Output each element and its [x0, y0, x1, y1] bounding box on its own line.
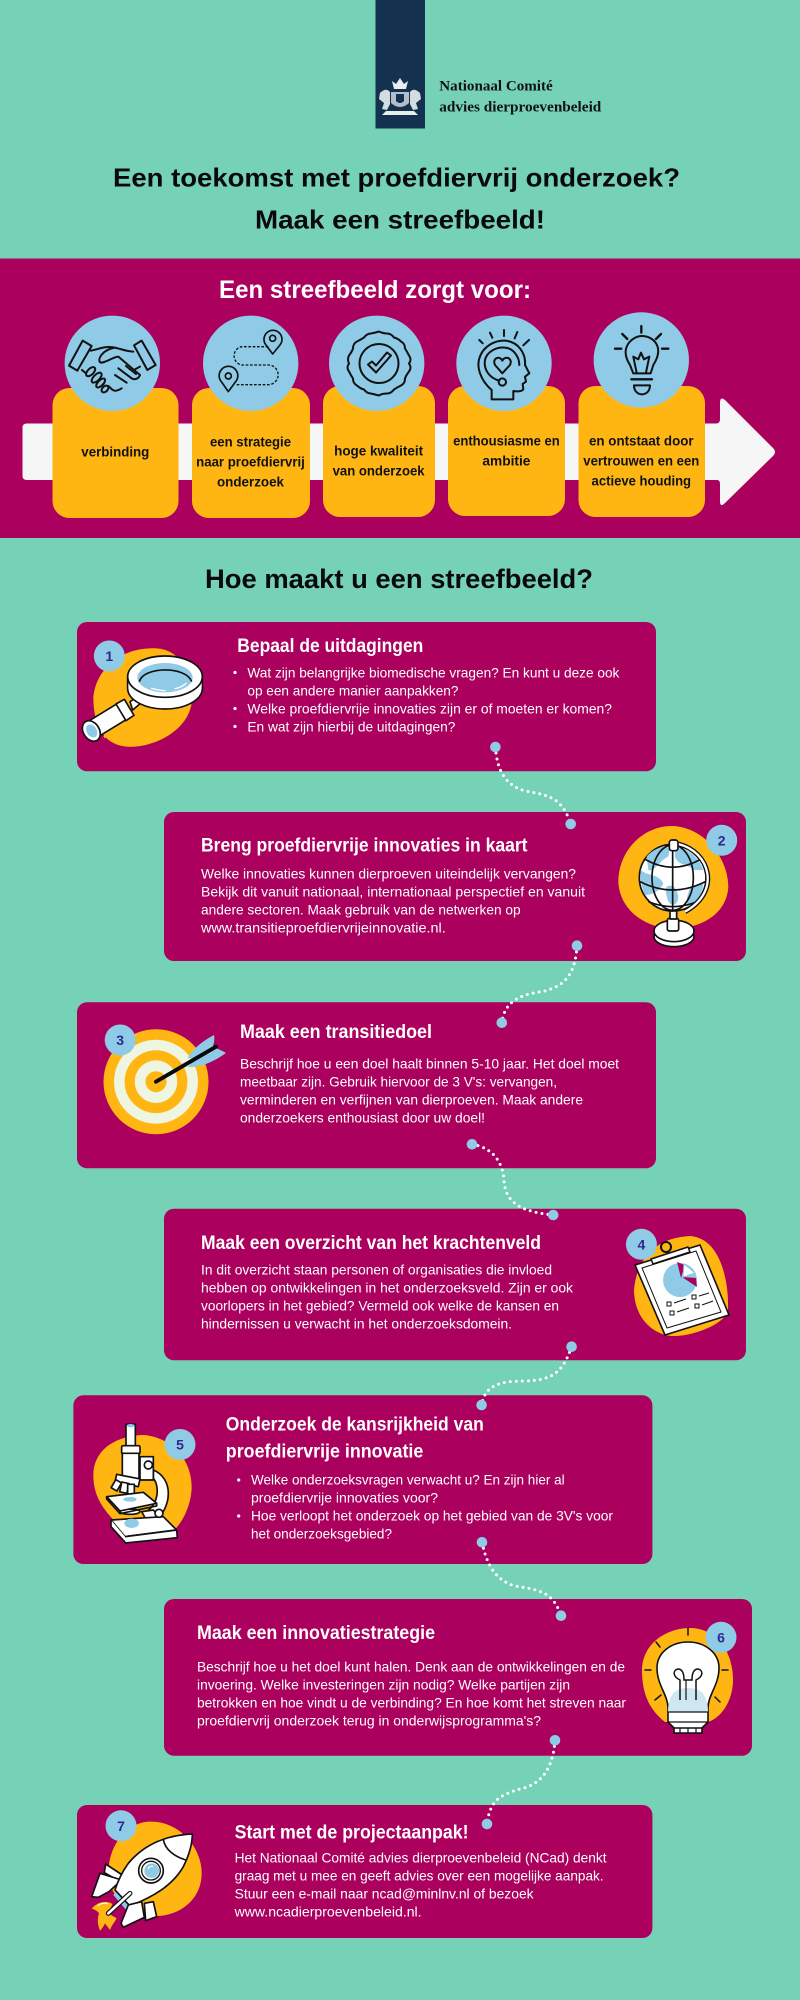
logo: Rijksoverheid ribbon with coat of arms — [376, 0, 425, 128]
icon: clipboard with chart — [634, 1236, 729, 1336]
body text: Bekijk dit vanuit nationaal, internationaal perspectief en vanuit — [201, 883, 585, 899]
body text: hebben op ontwikkelingen in het onderzoeksveld. Zijn er ook — [201, 1279, 574, 1295]
step 5: onderzoek de kansrijkheid — [73, 1395, 652, 1564]
badge: 1: 1 — [105, 648, 113, 664]
body text: invoering. Welke investeringen zijn nodig? Welke partijen zijn — [197, 1676, 570, 1692]
label: strategie: een strategie — [210, 434, 291, 450]
icon: target with dart — [104, 1029, 226, 1134]
bullet list — [237, 1471, 613, 1541]
body text: Beschrijf hoe u een doel haalt binnen 5-10 jaar. Het doel moet — [240, 1055, 619, 1071]
panel: een streefbeeld zorgt voor — [0, 258, 800, 538]
logo text: advies dierproevenbeleid — [439, 100, 602, 116]
badge: 3: 3 — [116, 1032, 124, 1048]
icon: rocket — [92, 1822, 202, 1931]
body text: onderzoekers enthousiast door uw doel! — [240, 1109, 485, 1125]
heading: Maak een innovatiestrategie — [197, 1622, 435, 1644]
badge: 4 — [626, 1229, 657, 1260]
heading: Start met de projectaanpak! — [235, 1822, 469, 1844]
bullet list: proefdiervrije innovaties voor? — [251, 1489, 438, 1505]
badge: 6: 6 — [717, 1629, 725, 1645]
icon: light bulb — [642, 1628, 733, 1733]
icon: quality badge — [348, 332, 410, 396]
heading: Bepaal de uitdagingen — [237, 635, 423, 657]
card: enthousiasme — [448, 316, 565, 516]
label: strategie: naar proefdiervrij — [196, 453, 305, 469]
body text: meetbaar zijn. Gebruik hiervoor de 3 V's: vervangen, — [240, 1073, 557, 1089]
label: kwaliteit: van onderzoek — [333, 462, 425, 478]
connector: step 5 to 6 — [477, 1537, 566, 1621]
label: vertrouwen — [583, 432, 699, 488]
card: strategie — [192, 316, 310, 518]
icon: handshake — [69, 341, 156, 394]
body text: verminderen en verfijnen van dierproeven. Maak andere — [240, 1091, 583, 1107]
title: Maak een streefbeeld! — [255, 205, 545, 235]
label: enthousiasme: enthousiasme en — [453, 432, 560, 448]
body text: www.ncadierproevenbeleid.nl. — [234, 1903, 422, 1919]
logo text: Nationaal Comité — [439, 79, 553, 95]
connector: step 6 to 7 — [482, 1735, 560, 1829]
heading: een streefbeeld zorgt voor: Een streefbeeld zorgt voor: — [219, 276, 531, 304]
label: enthousiasme — [453, 432, 560, 468]
connector: step 2 to 3 — [496, 940, 582, 1028]
step 7: start met de projectaanpak — [77, 1805, 652, 1938]
step 1: bepaal de uitdagingen — [77, 622, 656, 771]
icon: magnifier — [79, 648, 202, 747]
badge: 7 — [106, 1810, 136, 1841]
body text: betrokken en hoe vindt u de verbinding? En hoe komt het streven naar — [197, 1694, 626, 1710]
icon: light bulb — [615, 326, 668, 394]
body text: andere sectoren. Maak gebruik van de netwerken op — [201, 901, 521, 917]
body text — [240, 1055, 619, 1125]
body text — [234, 1849, 607, 1919]
icon: microscope — [93, 1424, 192, 1543]
bullet list: op een andere manier aanpakken? — [247, 682, 459, 698]
bullet list — [233, 664, 620, 734]
body text: voorlopers in het gebied? Vermeld ook welke de kansen en — [201, 1297, 559, 1313]
badge: 3 — [105, 1024, 136, 1056]
body text: Stuur een e-mail naar ncad@minlnv.nl of bezoek — [235, 1885, 535, 1901]
title: Een toekomst met proefdiervrij onderzoek? — [113, 163, 680, 193]
body text: www.transitieproefdiervrijeinnovatie.nl. — [200, 919, 446, 935]
body text: Het Nationaal Comité advies dierproevenbeleid (NCad) denkt — [235, 1849, 607, 1865]
badge: 1 — [94, 640, 125, 672]
label: vertrouwen: vertrouwen en een — [583, 452, 699, 468]
label: kwaliteit — [333, 442, 425, 478]
body text: proefdiervrij onderzoek terug in onderwijsprogramma's? — [197, 1712, 541, 1728]
label: kwaliteit: hoge kwaliteit — [334, 442, 423, 458]
badge: 5 — [164, 1429, 196, 1460]
icon: route with pins — [219, 330, 282, 392]
arrow — [22, 399, 775, 505]
connector: step 3 to 4 — [467, 1139, 558, 1220]
badge: 5: 5 — [176, 1436, 184, 1452]
logo text — [439, 79, 602, 116]
card: verbinding — [52, 316, 178, 518]
heading: Breng proefdiervrije innovaties in kaart — [201, 834, 528, 856]
badge: 4: 4 — [638, 1236, 646, 1252]
title — [113, 163, 680, 235]
card: vertrouwen — [578, 312, 705, 517]
body text: Beschrijf hoe u het doel kunt halen. Denk aan de ontwikkelingen en de — [197, 1658, 625, 1674]
connector: step 1 to 2 — [490, 742, 576, 829]
step 2: breng innovaties in kaart — [164, 812, 746, 961]
label: vertrouwen: en ontstaat door — [589, 432, 694, 448]
bullet list: het onderzoeksgebied? — [251, 1525, 392, 1541]
label: enthousiasme: ambitie — [482, 452, 531, 468]
bullet list: En wat zijn hierbij de uitdagingen? — [247, 718, 456, 734]
body text: In dit overzicht staan personen of organisaties die invloed — [201, 1261, 552, 1277]
body text — [197, 1658, 626, 1728]
icon: head with heart — [478, 330, 529, 399]
heading: proefdiervrije innovatie — [226, 1440, 423, 1462]
badge: 6 — [706, 1622, 736, 1653]
heading: Maak een transitiedoel — [240, 1021, 432, 1043]
badge: 2: 2 — [718, 832, 726, 848]
label: verbinding: verbinding — [81, 444, 149, 460]
card: kwaliteit — [323, 316, 435, 517]
body text — [201, 1261, 574, 1331]
body text: graag met u mee en geeft advies over een mogelijke aanpak. — [235, 1867, 604, 1883]
step 3: maak een transitiedoel — [77, 1002, 656, 1168]
label: vertrouwen: actieve houding — [592, 472, 691, 488]
badge: 7: 7 — [117, 1818, 125, 1834]
icon: globe — [618, 826, 728, 947]
bullet list: Welke proefdiervrije innovaties zijn er of moeten er komen? — [247, 700, 612, 716]
step 6: maak een innovatiestrategie — [164, 1599, 752, 1756]
connector: step 4 to 5 — [476, 1341, 577, 1410]
body text: hindernissen u verwacht in het onderzoeksdomein. — [201, 1315, 512, 1331]
label: strategie: onderzoek — [217, 473, 284, 489]
heading: Maak een overzicht van het krachtenveld — [201, 1232, 541, 1254]
heading — [226, 1414, 484, 1462]
bullet list: Wat zijn belangrijke biomedische vragen? En kunt u deze ook — [247, 664, 620, 680]
bullet list: Hoe verloopt het onderzoek op het gebied van de 3V's voor — [251, 1507, 613, 1523]
body text — [200, 865, 585, 935]
badge: 2 — [706, 825, 737, 856]
bullet list: Welke onderzoeksvragen verwacht u? En zijn hier al — [251, 1471, 565, 1487]
label: strategie — [196, 434, 305, 489]
body text: Welke innovaties kunnen dierproeven uiteindelijk vervangen? — [201, 865, 576, 881]
heading: Onderzoek de kansrijkheid van — [226, 1414, 484, 1436]
heading: hoe maakt u een streefbeeld: Hoe maakt u een streefbeeld? — [205, 564, 593, 594]
step 4: overzicht krachtenveld — [164, 1209, 746, 1360]
